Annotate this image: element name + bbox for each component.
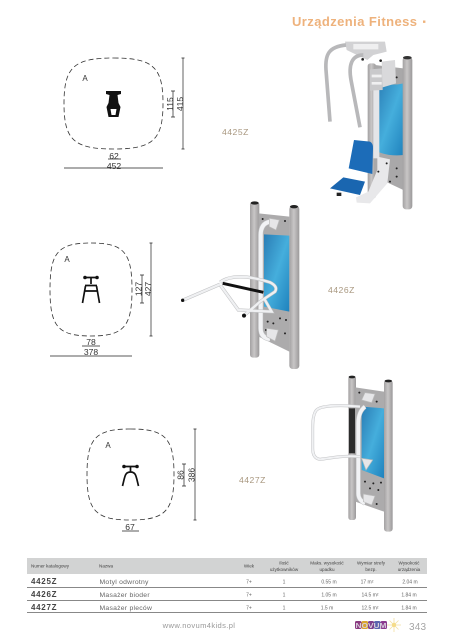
table row: 4425Z: 17 m² (361, 580, 374, 586)
table row: 4426Z: Masażer bioder (100, 592, 150, 599)
table row: 4426Z: 14.5 m² (362, 592, 379, 598)
table row: 4427Z (27, 603, 427, 613)
table header row: Wymiar strefy (357, 560, 386, 566)
equipment illustration: 4425Z (326, 42, 412, 209)
table header row: Wiek (244, 564, 255, 568)
table row: 4427Z: 1.84 m (401, 606, 417, 612)
table row: 4425Z: 4425Z (31, 577, 57, 586)
table row: 4425Z: 2.04 m (402, 580, 418, 586)
table row: 4425Z: 1 (283, 580, 286, 586)
plan diagram: 4425Z (64, 58, 185, 171)
logo: NOVUM: NOVUM (356, 621, 386, 630)
table header row: Ilość (279, 560, 289, 566)
plan diagram: 4426Z: A (64, 255, 70, 264)
table row: 4425Z: 7+ (246, 580, 252, 586)
table row: 4427Z: 1 (283, 606, 286, 612)
table header row: upadku (319, 567, 335, 572)
icon: sun (387, 618, 401, 632)
table row: 4427Z: 4427Z (31, 603, 57, 612)
table header row: Maks. wysokość (310, 560, 344, 566)
title marker dot (423, 20, 425, 23)
plan diagram: 4426Z: 127 (134, 282, 144, 296)
table header row: Wysokość (399, 560, 420, 566)
plan diagram: 4427Z: A (105, 441, 111, 450)
table row: 4427Z: 1.5 m (321, 606, 333, 612)
table row: 4426Z: 4426Z (31, 590, 57, 599)
table row: 4425Z: Motyl odwrotny (100, 579, 149, 586)
equipment illustration: 4426Z (181, 201, 299, 369)
footer website: www.novum4kids.pl (162, 621, 235, 630)
title: Urządzenia Fitness: Urządzenia Fitness (292, 14, 417, 29)
table: specifications (27, 558, 427, 613)
plan diagram: 4425Z: 415 (175, 97, 185, 111)
plan diagram: 4426Z (50, 243, 153, 357)
table row: 4426Z: 1 (283, 592, 286, 598)
table row: 4427Z: Masażer pleców (100, 605, 152, 612)
plan diagram: 4426Z: 378 (84, 347, 98, 357)
table row: 4426Z: 1.05 m (321, 592, 337, 598)
plan diagram: 4425Z: 62 (109, 151, 119, 161)
plan diagram: 4426Z: 78 (86, 337, 96, 347)
table row: 4426Z (27, 590, 427, 601)
plan diagram: 4427Z: 67 (125, 522, 135, 532)
table header row: Nazwa (99, 564, 113, 568)
product code 4426Z: 4426Z (328, 285, 355, 295)
table header row: użytkowników (270, 567, 299, 572)
table row: 4425Z (27, 577, 427, 588)
page number: 343 (409, 622, 426, 633)
table header row (27, 558, 427, 574)
table header row: urządzenia (398, 567, 421, 572)
equipment illustration: 4427Z (313, 376, 393, 532)
plan diagram: 4425Z: A (82, 74, 88, 83)
product code 4427Z: 4427Z (239, 475, 266, 485)
plan diagram: 4425Z: 115 (165, 97, 175, 111)
table row: 4426Z: 1.84 m (401, 592, 417, 598)
table row: 4426Z: 7+ (246, 592, 252, 598)
table header row: Numer katalogowy (31, 564, 70, 568)
plan diagram: 4427Z: 86 (176, 470, 186, 480)
plan diagram: 4427Z (87, 429, 196, 532)
plan diagram: 4425Z: 452 (107, 161, 121, 171)
plan diagram: 4426Z: 427 (143, 282, 153, 296)
table row: 4427Z: 12.5 m² (362, 606, 379, 612)
table header row: bezp. (365, 567, 377, 572)
table row: 4425Z: 0.55 m (321, 580, 337, 586)
table row: 4427Z: 7+ (246, 606, 252, 612)
product code 4425Z: 4425Z (222, 127, 249, 137)
plan diagram: 4427Z: 386 (186, 468, 196, 482)
